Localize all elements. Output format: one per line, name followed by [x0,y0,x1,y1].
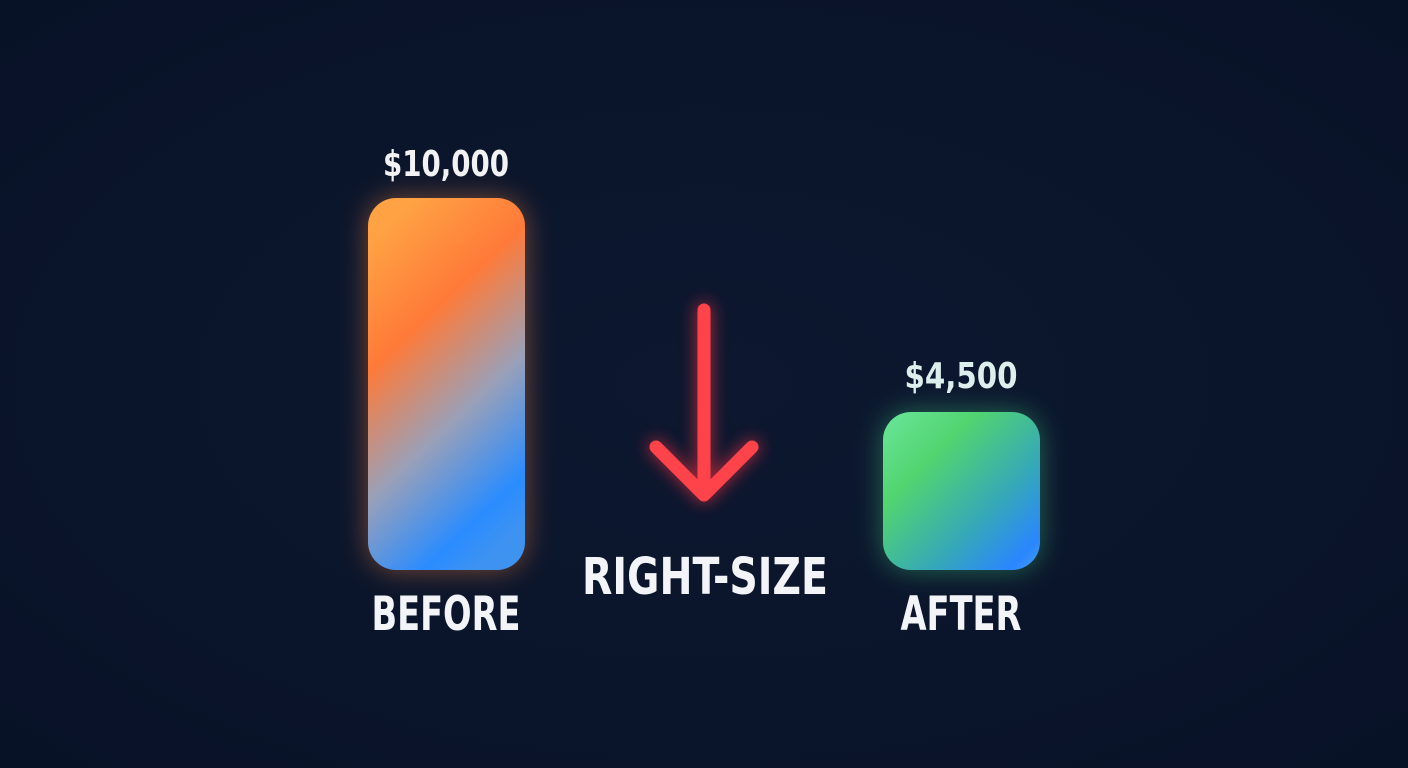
panel: before bar [368,198,525,570]
label: before value: $10,000 [383,144,509,185]
arrow: down [656,310,752,495]
label: right-size: RIGHT-SIZE [582,548,828,607]
label: after value: $4,500 [904,356,1018,397]
panel: after box [883,412,1040,570]
label: before: BEFORE [372,587,520,642]
label: after: AFTER [900,587,1022,642]
